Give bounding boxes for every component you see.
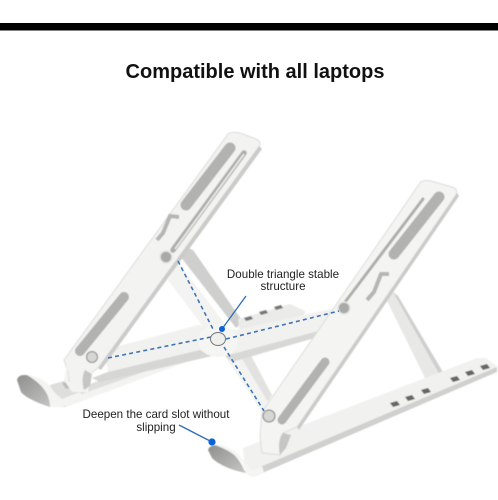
right arm [260,180,459,455]
cross bar [92,308,335,382]
callout: double triangle [219,268,339,332]
left front strut with dashed line [168,262,272,412]
left arm lower grip pad [80,297,124,351]
left stand rear strut [180,247,243,328]
top black bar [0,23,498,30]
blue dashed structure lines [108,261,339,411]
center pivot ring [210,332,226,346]
right foot [208,444,264,477]
right hinge notch [279,433,291,455]
left hinge [64,363,92,392]
left arm lower pivot [86,352,98,362]
right stand rear strut [385,292,450,389]
right base bar [243,358,497,477]
laptop stand illustration [17,132,497,477]
right arm lower pivot [263,410,275,422]
callout: card slot [83,408,230,446]
right arm upper grip pad [394,197,439,254]
left foot [17,375,82,407]
callout: double triangle: structure [260,280,306,293]
callout: card slot: slipping [136,421,176,434]
right arm upper pivot [338,302,350,314]
callout: card slot: Deepen the card slot without [83,408,230,421]
left arm clip [157,216,179,240]
left base bar [50,344,212,407]
center hub [198,325,238,357]
right arm slot [342,199,423,306]
left arm slot [173,153,244,250]
title: Compatible with all laptops [126,61,384,83]
left arm upper grip pad [186,148,230,205]
right arm clip [367,274,389,300]
right arm lower grip pad [282,362,325,420]
rear base section with slots [238,304,305,336]
left arm [64,132,262,392]
callout: double triangle: Double triangle stable [227,268,339,281]
left arm upper pivot [160,251,172,263]
